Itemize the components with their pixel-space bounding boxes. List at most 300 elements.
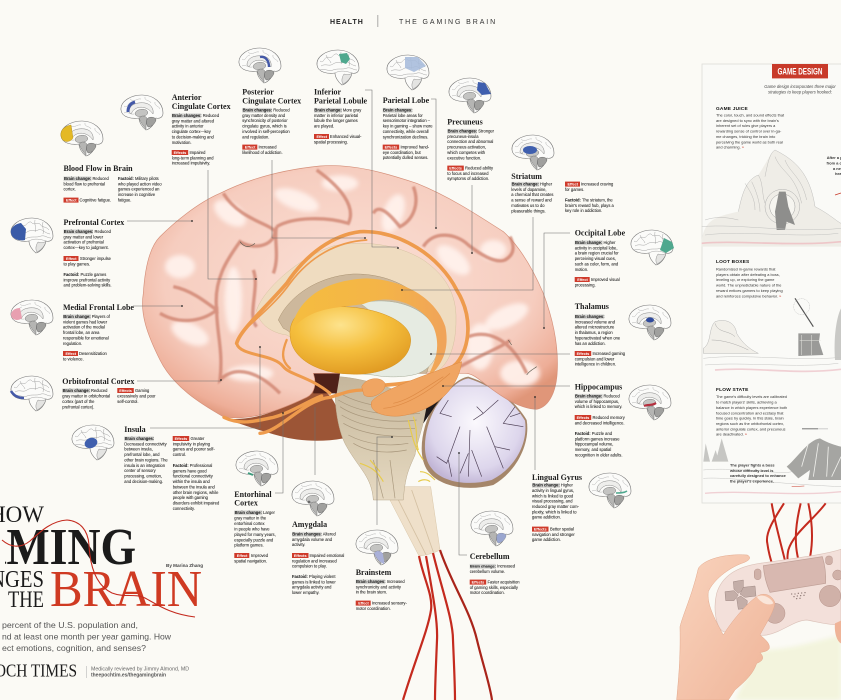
- callout: Brainstem: Effect: [358, 601, 369, 605]
- section: flow state: to match players' skills, achieving a: [716, 400, 777, 405]
- callout: Precuneus: which competes with: [447, 150, 486, 155]
- callout: Hippocampus: which is linked to memory.: [575, 404, 623, 409]
- section: flow state: focused concentration and ecstasy that: [716, 410, 784, 415]
- callout: Prefrontal Cortex: Stronger impulse: [80, 256, 111, 261]
- gyri highlights: [165, 175, 540, 387]
- callout: Prefrontal Cortex: to play games.: [64, 261, 90, 266]
- callout: Hippocampus: [575, 382, 626, 457]
- callout: Parietal Lobe: synchronization declines.: [383, 134, 428, 139]
- heading: posterior cingulate: Posterior: [242, 88, 274, 96]
- red cables into controller: [767, 503, 826, 563]
- title: how gaming changes the: [0, 502, 136, 612]
- section: game juice: me changes, tricking the brain into: [716, 134, 775, 139]
- heading: inferior parietal: Inferior: [314, 88, 341, 96]
- heading: insula: Insula: [124, 425, 146, 434]
- callout: Thalamus: intelligence in children.: [575, 362, 616, 367]
- heading: amygdala: Amygdala: [292, 520, 327, 529]
- callout: Amygdala: amygdala volume and: [292, 537, 333, 542]
- sketch: loot chest and sword: [703, 298, 841, 371]
- callout: Blood Flow in Brain: games experienced an: [118, 187, 160, 192]
- callout: Striatum: levels of dopamine,: [511, 187, 547, 192]
- callout: Insula: and decision-making.: [124, 479, 163, 484]
- leader: posterior cingulate: [272, 160, 365, 238]
- callout: Posterior Cingulate Cortex: involved in self-perception: [242, 129, 290, 134]
- title block: theepochtim.es/thegamingbrain: [91, 672, 166, 678]
- callout: Orbitofrontal Cortex: cortex (part of the: [62, 399, 95, 404]
- callout: Precuneus: symptoms of addiction.: [447, 176, 489, 181]
- header: section label: THE GAMING BRAIN: [399, 19, 497, 26]
- section: game juice: rewarding sense of control over in-ga-: [716, 129, 782, 134]
- callout: Amygdala: compulsion to play.: [292, 564, 327, 569]
- section: flow state: regions such as the orbitofrontal cortex,: [716, 421, 784, 426]
- icon: hippocampus brain: [629, 385, 671, 420]
- heading: cerebellum: Cerebellum: [470, 552, 510, 561]
- striatum gold body: [290, 306, 411, 374]
- heading: hippocampus: Hippocampus: [575, 382, 622, 392]
- heading: inferior parietal: Parietal Lobule: [314, 96, 368, 105]
- header: section label: [330, 15, 497, 27]
- callout: Occipital Lobe: activity in occipital lobe,: [575, 245, 617, 250]
- callout: Posterior Cingulate Cortex: likelihood of addiction.: [242, 150, 283, 155]
- leader: entorhinal cortex: [275, 413, 283, 493]
- callout: Precuneus: Reduced ability: [465, 166, 493, 170]
- callout: Thalamus: hyperactivated when one: [575, 335, 621, 340]
- callout: Inferior Parietal Lobule: are played.: [314, 124, 334, 129]
- callout: Cerebellum: of gaming skills, especially: [470, 585, 519, 590]
- section: flow state: are deactivated. »: [716, 432, 747, 437]
- section: loot boxes: Randomized in-game rewards that: [716, 266, 775, 272]
- callout: Precuneus: precuneus-insula: [447, 134, 479, 139]
- thalamus white body: [327, 301, 439, 377]
- callout: Entorhinal Cortex: [234, 490, 276, 563]
- callout: Occipital Lobe: perceiving visual cues,: [575, 256, 616, 261]
- callout: Insula: connectivity.: [173, 506, 195, 511]
- callout: Precuneus: precuneus activation,: [447, 145, 486, 150]
- section: flow state: time goes by quickly. In this state, brain: [716, 416, 784, 421]
- section: loot boxes: leveling up, or exploring the game: [716, 277, 774, 282]
- section: flow state: anterior cingulate cortex, and precuneus: [716, 426, 785, 431]
- callout: Posterior Cingulate Cortex: Effect: [245, 145, 256, 149]
- callout: Parietal Lobe: Parietal lobe areas for: [383, 113, 423, 118]
- red swoosh: [2, 520, 195, 617]
- callout: Hippocampus: hippocampal volume,: [575, 442, 613, 447]
- section: game juice: and charming. »: [716, 145, 744, 150]
- leader: cerebellum: [459, 453, 467, 555]
- callout: Amygdala: Impaired emotional: [310, 553, 344, 558]
- callout: Precuneus: executive function.: [447, 155, 481, 160]
- callout: Prefrontal Cortex: and problem-solving skills.: [64, 283, 112, 288]
- callout: Entorhinal Cortex: spatial navigation.: [234, 558, 267, 563]
- callout: Anterior Cingulate Cortex: cingulate cortex—key: [172, 129, 212, 134]
- section: loot boxes: [716, 259, 783, 298]
- leader: medial frontal lobe: [133, 305, 182, 307]
- callout: Anterior Cingulate Cortex: to decision-making and: [172, 134, 215, 139]
- progress bar: [802, 428, 828, 429]
- callout: Striatum: motivates us to do: [511, 203, 545, 208]
- callout: Cerebellum: cerebellum volume.: [470, 569, 505, 574]
- main brain illustration: [142, 166, 557, 556]
- title block: Medically reviewed by Jimmy Almond, MD: [91, 666, 189, 672]
- callout: Striatum: Factoid: The striatum, the: [565, 198, 613, 202]
- callout: Occipital Lobe: [575, 228, 626, 287]
- heading: anterior cingulate: Cingulate Cortex: [172, 102, 231, 111]
- callout: Anterior Cingulate Cortex: Effects: [174, 151, 186, 155]
- callout: Cerebellum: [470, 552, 520, 595]
- callout: Insula: center of sensory: [124, 468, 157, 473]
- callout: Anterior Cingulate Cortex: motivation.: [172, 140, 191, 145]
- callout: Blood Flow in Brain: Brain change: Reduced: [64, 176, 109, 181]
- callout: Striatum: Increased craving: [581, 182, 613, 186]
- callout: Anterior Cingulate Cortex: activity in anterior: [172, 124, 204, 129]
- leader: thalamus: [431, 353, 570, 355]
- sketch caption: The player fights a boss: [730, 462, 775, 468]
- callout: Lingual Gyrus: Effects: [534, 527, 547, 531]
- callout: Medial Frontal Lobe: responsible for emotional: [63, 335, 109, 340]
- panel heading: GAME DESIGN: [778, 66, 822, 76]
- callout: Entorhinal Cortex: platform games.: [234, 543, 264, 548]
- title: brain: BRAIN: [50, 561, 202, 618]
- callout: Hippocampus: Brain change: Reduced: [575, 394, 620, 398]
- heading: anterior cingulate: Anterior: [172, 93, 201, 102]
- callout: Entorhinal Cortex: Effect: [237, 554, 248, 558]
- callout: Parietal Lobe: [383, 96, 433, 160]
- callout: Amygdala: lower empathy.: [292, 590, 320, 595]
- callout: Thalamus: in thalamus, a region: [575, 330, 613, 335]
- panel heading: [772, 64, 828, 78]
- heading: precuneus: Precuneus: [447, 118, 483, 126]
- callout: Parietal Lobe: sensorimotor integration –: [383, 118, 431, 123]
- inner brown lining: [278, 274, 440, 373]
- callout: Entorhinal Cortex: Improved: [251, 553, 268, 558]
- callout: Thalamus: altered microstructure: [575, 325, 615, 330]
- arrow: red pointer: [835, 193, 841, 195]
- leader: inferior parietal lobule: [365, 90, 398, 247]
- callout: Hippocampus: memory, and spatial: [575, 447, 611, 452]
- callout: Posterior Cingulate Cortex: and regulation.: [242, 134, 269, 139]
- sketch caption: carefully designed to enhance: [730, 473, 787, 478]
- icon: prefrontal brain: [11, 218, 53, 253]
- callout: Precuneus: Effects: [449, 166, 462, 170]
- section: flow state: [716, 387, 787, 437]
- heading: brainstem: Brainstem: [356, 568, 392, 577]
- callout: Orbitofrontal Cortex: gray matter in orbitofrontal: [62, 393, 110, 398]
- d-pad: [725, 580, 756, 609]
- callout: Thalamus: has an addiction.: [575, 341, 606, 346]
- callout: Precuneus: to focus and increased: [447, 171, 489, 176]
- callout: Orbitofrontal Cortex: excessively and poor: [117, 393, 156, 398]
- callout: Prefrontal Cortex: Brain changes: Reduced: [64, 229, 111, 234]
- icon: striatum brain: [512, 135, 554, 170]
- leader: anterior cingulate: [208, 170, 256, 279]
- section: game juice: The color, touch, and sound effects that: [716, 112, 784, 118]
- callout: Cerebellum: Faster acquisition: [488, 580, 520, 584]
- section: loot boxes: reward entices gamers to keep playing: [716, 288, 783, 293]
- icon: amygdala brain: [292, 481, 334, 516]
- callout: Lingual Gyrus: game addiction.: [532, 515, 561, 520]
- callout: Blood Flow in Brain: cortex.: [64, 187, 76, 192]
- callout: Parietal Lobe: Improved hand-: [400, 144, 429, 150]
- callout: Hippocampus: and decreased intelligence.: [575, 420, 625, 425]
- callout: Parietal Lobe: potentially dulled senses.: [383, 155, 428, 160]
- callout: Medial Frontal Lobe: to violence.: [63, 356, 84, 361]
- callout: Striatum: for games.: [565, 187, 584, 192]
- callout: Striatum: key role in addiction.: [565, 208, 602, 213]
- heading: posterior cingulate: Cingulate Cortex: [242, 96, 301, 105]
- callout: Insula: other brain regions, while: [173, 490, 219, 495]
- callout: Amygdala: [292, 520, 344, 595]
- leader: striatum: [402, 217, 533, 290]
- callout: Insula: gamers have good: [173, 468, 207, 473]
- callout: Thalamus: compulsion and lower: [575, 356, 615, 361]
- callout: Prefrontal Cortex: activation of prefrontal: [64, 240, 104, 245]
- callout: Insula: Greater: [190, 436, 204, 441]
- callout: Hippocampus: Effects: [577, 416, 589, 420]
- intro paragraph: ect emotions, cognition, and senses?: [2, 643, 146, 653]
- callout: Medial Frontal Lobe: regulation.: [63, 341, 82, 346]
- section: flow state: balance in which players experience both: [716, 405, 787, 410]
- callout: Blood Flow in Brain: increase in cognitive: [118, 192, 156, 197]
- icon: anterior cingulate brain: [121, 95, 163, 130]
- heading: orbitofrontal: Orbitofrontal Cortex: [62, 377, 134, 386]
- callout: Brainstem: [356, 568, 407, 611]
- callout: Striatum: [511, 172, 615, 213]
- sketch: rock arch with hero: [702, 150, 841, 247]
- leader: insula: [150, 347, 260, 428]
- section: game juice: perceiving the game world as both real: [716, 139, 783, 144]
- callout: Orbitofrontal Cortex: prefrontal cortex).: [62, 404, 94, 409]
- callout: Entorhinal Cortex: Brain change: Larger: [235, 510, 275, 515]
- callout: Amygdala: Brain changes: Altered: [292, 532, 336, 536]
- callout: Striatum: a chemical that creates: [511, 192, 553, 197]
- leader: hippocampus: [443, 385, 570, 387]
- callout: Insula: Decreased connectivity: [124, 441, 168, 446]
- callout: Thalamus: Brain changes:: [575, 314, 605, 319]
- icon: thalamus brain: [629, 305, 671, 340]
- leader: brainstem: [377, 437, 392, 525]
- callout: Posterior Cingulate Cortex: gray matter density and: [242, 113, 286, 118]
- callout: Anterior Cingulate Cortex: Impaired: [190, 150, 205, 155]
- icon: inferior parietal brain: [317, 50, 359, 85]
- leader end dots: [181, 220, 545, 454]
- callout: Insula: games and poorer self-: [173, 447, 215, 452]
- callout: Lingual Gyrus: plexity, which is linked to: [532, 509, 577, 514]
- callout: Insula: other brain regions. The: [124, 457, 168, 462]
- callout: Cerebellum: Effects: [472, 580, 484, 584]
- callout: Lingual Gyrus: Brain change: Higher: [532, 483, 573, 488]
- section: game juice: [716, 106, 785, 150]
- callout: Thalamus: Increased volume and: [575, 319, 616, 324]
- callout: Posterior Cingulate Cortex: Increased: [258, 144, 276, 150]
- callout: Lingual Gyrus: game addiction.: [532, 537, 561, 542]
- section: flow state: FLOW STATE: [716, 387, 749, 393]
- callout: Striatum: brain's reward hub, plays a: [565, 203, 615, 208]
- heading: parietal lobe: Parietal Lobe: [383, 96, 430, 105]
- callout: Medial Frontal Lobe: violent games had lower: [63, 319, 108, 324]
- icon: blood flow brain: [61, 121, 103, 156]
- callout: Anterior Cingulate Cortex: long-term planning and: [172, 155, 214, 160]
- callout: Medial Frontal Lobe: Desensitization: [79, 351, 107, 356]
- icon: precuneus brain: [449, 78, 491, 113]
- sketch caption: whose difficulty level is: [729, 468, 773, 473]
- dark midbrain gap: [312, 373, 340, 393]
- callout: Brainstem: synchronicity and activity: [356, 584, 402, 589]
- callout: Amygdala: games is linked to lower: [292, 579, 336, 584]
- callout: Entorhinal Cortex: in people who have: [234, 526, 270, 531]
- callout: Hippocampus: recognition in older adults.: [575, 452, 622, 457]
- section: game juice: are designed to sync with the brain's: [716, 118, 779, 123]
- callout: Prefrontal Cortex: [64, 218, 124, 288]
- callout: Insula: functional connectivity: [173, 474, 214, 479]
- speaker dots: [791, 592, 806, 599]
- callout: Medial Frontal Lobe: [63, 303, 134, 361]
- section: game juice: GAME JUICE: [716, 106, 748, 112]
- callout: Lingual Gyrus: Better spatial: [550, 526, 574, 532]
- callout: Insula: Effects: [175, 437, 187, 441]
- icon: orbitofrontal brain: [11, 376, 53, 411]
- callout: Blood Flow in Brain: blood flow to prefrontal: [64, 181, 105, 186]
- callout: Amygdala: activity.: [292, 542, 305, 547]
- callout: Insula: impulsivity in playing: [173, 441, 211, 446]
- callout: Inferior Parietal Lobule: spatial processing.: [314, 139, 348, 144]
- byline: By Marina Zhang: [166, 563, 203, 568]
- callout: Precuneus: [447, 118, 495, 181]
- callout: Amygdala: Factoid: Playing violent: [292, 574, 335, 579]
- icon: lingual gyrus brain: [589, 473, 631, 508]
- callout: Insula: processing, emotion,: [124, 473, 162, 478]
- callout: Brainstem: Brain changes: Increased: [356, 579, 405, 584]
- callout: Anterior Cingulate Cortex: increased impulsivity.: [172, 161, 210, 166]
- heading: occipital lobe: Occipital Lobe: [575, 228, 626, 238]
- callout: Occipital Lobe: processing.: [575, 282, 596, 287]
- callout: Blood Flow in Brain: Effect: [66, 198, 77, 202]
- callout: Parietal Lobe: Effects: [385, 145, 397, 149]
- callout: Parietal Lobe: connectivity, while overall: [383, 129, 429, 134]
- callout: Entorhinal Cortex: gray matter in the: [234, 515, 267, 520]
- callout: Parietal Lobe: eye coordination, but: [383, 150, 422, 155]
- hand: [677, 555, 775, 700]
- icon: brainstem brain: [356, 530, 398, 565]
- callout: Occipital Lobe: motion.: [575, 267, 588, 272]
- corpus callosum: [257, 243, 456, 372]
- callout: Hippocampus: Reduced memory: [592, 415, 625, 420]
- leader: amygdala: [314, 407, 316, 475]
- heading: blood flow: Blood Flow in Brain: [64, 164, 133, 173]
- section: loot boxes: LOOT BOXES: [716, 259, 750, 265]
- other hand: [835, 621, 841, 643]
- heading: medial frontal: Medial Frontal Lobe: [63, 303, 134, 312]
- panel intro: Game design incorporates three major: [764, 84, 836, 89]
- callout: Entorhinal Cortex: played for many years,: [234, 532, 276, 537]
- title block: [0, 502, 203, 681]
- callout: Cerebellum: Brain change: Increased: [470, 564, 515, 568]
- callout: Parietal Lobe: key in gaming – show more: [383, 124, 433, 129]
- callout: Occipital Lobe: such as color, form, and: [575, 261, 619, 266]
- red cables from spinal cord: [403, 550, 492, 700]
- callout: Anterior Cingulate Cortex: Brain changes: Reduced: [172, 113, 219, 118]
- leader: orbitofrontal cortex: [137, 380, 221, 382]
- buttons and stick: [754, 556, 841, 623]
- callout: Prefrontal Cortex: improve prefrontal activity: [64, 277, 111, 282]
- heading: entorhinal cortex: Cortex: [234, 499, 258, 508]
- callout: Lingual Gyrus: [532, 473, 582, 542]
- heading: prefrontal: Prefrontal Cortex: [64, 218, 124, 227]
- sulci shading: [160, 170, 527, 393]
- callout: Prefrontal Cortex: cortex—key to judgment.: [64, 245, 109, 250]
- callout: Prefrontal Cortex: Factoid: Puzzle games: [64, 272, 106, 277]
- icon: insula brain: [72, 425, 114, 460]
- leader: precuneus: [471, 185, 473, 253]
- callout: Hippocampus: Factoid: Puzzle and: [575, 431, 612, 436]
- leader: prefrontal cortex: [127, 220, 192, 222]
- icon: posterior cingulate brain: [239, 48, 281, 83]
- callout: Anterior Cingulate Cortex: gray matter and altered: [172, 118, 215, 123]
- leader lines: [127, 90, 570, 555]
- callout: Occipital Lobe: Improved visual: [591, 277, 620, 282]
- callout: Inferior Parietal Lobule: lobule the longer games: [314, 118, 358, 123]
- heading: lingual gyrus: Lingual Gyrus: [532, 473, 582, 482]
- callout: Prefrontal Cortex: Effect: [66, 257, 77, 261]
- heading: striatum: Striatum: [511, 172, 542, 181]
- callout: Inferior Parietal Lobule: Enhanced visual-: [330, 134, 361, 139]
- callout: Lingual Gyrus: reduced gray matter com-: [532, 504, 580, 509]
- callout: Inferior Parietal Lobule: matter in inferior parietal: [314, 113, 358, 118]
- callout: Occipital Lobe: Brain change: Higher: [575, 240, 616, 245]
- callout: Striatum: a sense of reward and: [511, 198, 553, 203]
- callout: Blood Flow in Brain: Factoid: Military pilots: [118, 176, 159, 181]
- callout: Precuneus: Brain changes: Stronger: [448, 128, 494, 134]
- callout: Blood Flow in Brain: [64, 164, 162, 203]
- callout: Thalamus: Increased gaming: [592, 351, 625, 356]
- callout: Occipital Lobe: Effect: [577, 278, 588, 282]
- leader: occipital lobe: [544, 233, 570, 328]
- callout: Insula: [124, 425, 220, 511]
- callout: Blood Flow in Brain: fatigue.: [118, 197, 131, 202]
- icon: cerebellum brain: [471, 511, 513, 546]
- callout: Precuneus: connection and abnormal: [447, 139, 493, 144]
- game controller and hand: [677, 503, 841, 700]
- callout: Insula: between insula,: [124, 447, 153, 452]
- intro paragraph: [2, 620, 172, 653]
- callout: Orbitofrontal Cortex: Effects: [119, 389, 132, 393]
- callout: Lingual Gyrus: navigation and stronger: [532, 532, 575, 537]
- callout: Parietal Lobe: Brain changes:: [383, 108, 413, 112]
- callout: Hippocampus: platform games increase: [575, 436, 620, 441]
- header: section label: HEALTH: [330, 19, 364, 26]
- callout: Lingual Gyrus: which is linked to good: [532, 493, 574, 498]
- callout: Posterior Cingulate Cortex: synchronicity of posterior: [242, 118, 288, 123]
- section: loot boxes: and reinforces compulsive behavior. »: [716, 293, 781, 298]
- section: flow state: The game's difficulty levels are calibrated: [716, 394, 787, 399]
- leader: lingual gyrus: [534, 397, 536, 470]
- callout: Insula: people with gaming: [173, 495, 209, 500]
- section: loot boxes: players obtain after defeating a boss,: [716, 272, 780, 277]
- callout: Inferior Parietal Lobule: Effect: [316, 135, 328, 139]
- callout: Striatum: Effect: [568, 182, 579, 186]
- title: how gaming changes the: THE: [8, 587, 44, 612]
- callout: Insula: Brain changes:: [125, 436, 154, 441]
- floor shadow near hand: [735, 635, 841, 700]
- callout: Orbitofrontal Cortex: self-control.: [117, 399, 138, 404]
- callout: Blood Flow in Brain: Cognitive fatigue.: [80, 198, 111, 202]
- callout: Amygdala: amygdala activity and: [292, 585, 332, 590]
- callout: Orbitofrontal Cortex: Brain change: Reduced: [63, 388, 107, 393]
- heading: entorhinal cortex: Entorhinal: [234, 490, 272, 499]
- callout: Insula: between the insula and: [173, 484, 216, 489]
- callout: Insula: control.: [173, 452, 186, 457]
- icon: parietal brain: [387, 55, 429, 90]
- callout: Insula: within the insula and: [173, 479, 211, 484]
- callout: Occipital Lobe: a brain region crucial for: [575, 251, 619, 256]
